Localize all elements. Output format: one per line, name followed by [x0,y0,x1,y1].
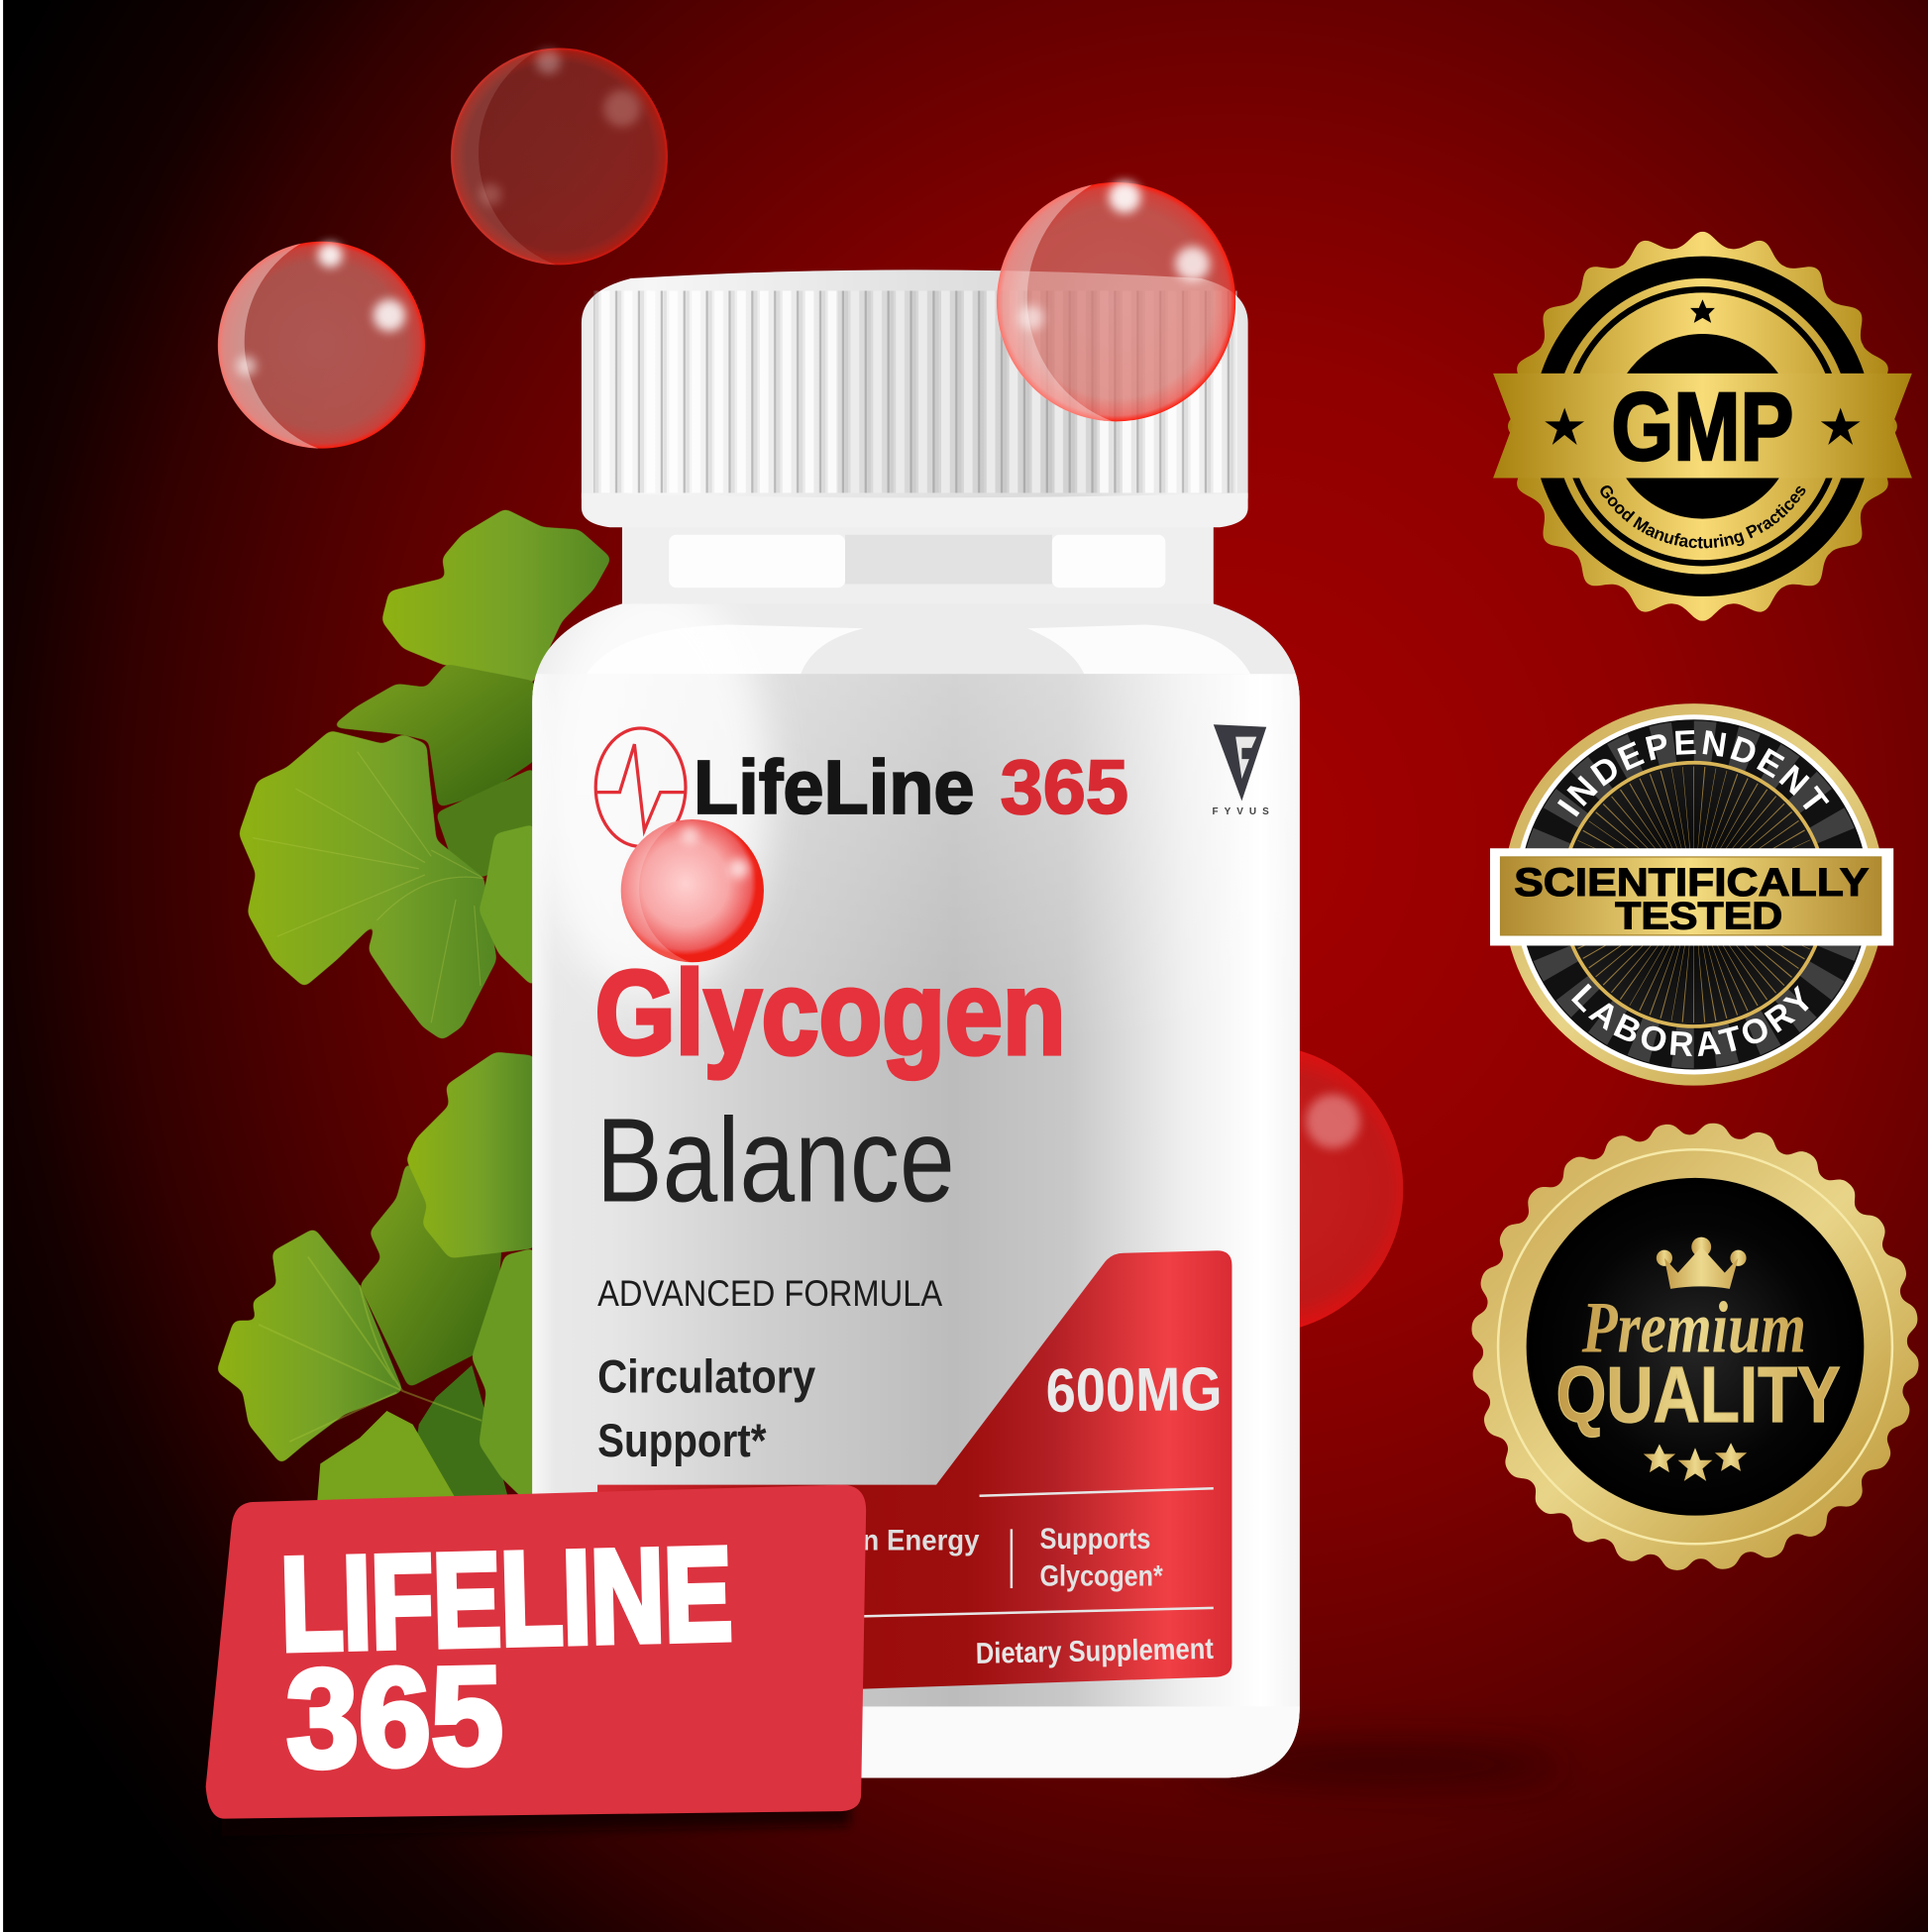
bubble: on cap [997,181,1235,421]
leaf: upper [406,1052,535,1258]
leaf stem and veins [259,1256,482,1442]
product name: Glycogen: Glycogen [595,947,1066,1079]
bubble: on label [620,819,764,962]
advanced formula: ADVANCED FORMULA [597,1272,942,1314]
leaf: right front [480,824,535,988]
supports glycogen text: Supports [1039,1523,1150,1556]
tag text: LIFELINE: LIFELINE [279,1521,733,1678]
FYVUS logo [1213,724,1269,817]
top star [1690,299,1715,323]
body shading [532,580,1300,1783]
badge: premium quality [1466,1118,1924,1576]
dosage: 600MG [1045,1355,1223,1426]
QUALITY text: QUALITY [1555,1350,1841,1439]
scalloped gold edge [1466,1118,1924,1576]
ring segments [1542,742,1847,1047]
sunburst [1630,830,1758,959]
bottle shadow [1195,1742,1564,1786]
cap ridges [593,290,1236,492]
red tag [206,1485,866,1819]
leaf: back middle [360,1162,501,1387]
benefit: circulatory support [597,1350,816,1467]
product name: Balance: Balance [596,1094,955,1228]
bottle body [532,603,1300,1778]
black disc [1519,719,1869,1069]
tag text: 365: 365 [285,1638,504,1796]
cap lip [582,492,1248,527]
script text: Premium [1581,1287,1806,1368]
red tag shadow [222,1801,850,1836]
ribbon stars [1545,408,1584,445]
leaf: right [472,1248,535,1509]
crown [1657,1237,1747,1289]
supports glycogen text: Glycogen* [1039,1560,1163,1593]
leaf: large [217,1229,403,1463]
brand logo: heartbeat circle [595,728,687,846]
band text line 1: SCIENTIFICALLY [1514,861,1869,905]
gold rim [1503,703,1884,1086]
white rim [1514,714,1874,1074]
leaf: top [381,509,611,684]
divider bottom [850,1608,1214,1617]
shoulder highlights [587,625,1250,674]
thin ring [1565,289,1839,563]
bubble: top center [451,49,668,265]
leaf: bottom [317,1411,462,1509]
supports glycogen text [1039,1523,1163,1593]
ginkgo leaves: lower cluster [217,1052,535,1509]
white band [1490,848,1893,945]
red label panel [597,1250,1232,1698]
ginkgo leaves: upper cluster [239,509,611,1040]
divider top [980,1488,1214,1496]
gold ring [1498,1149,1892,1544]
bubble: left [218,242,425,449]
brand name: LifeLine [694,745,975,830]
black ring [1544,268,1862,586]
benefit: circulatory support: Support* [597,1415,767,1467]
badge: GMP [1493,232,1912,621]
bottle [532,269,1300,1783]
inner disc [1562,763,1826,1026]
band text line 2: TESTED [1615,896,1782,938]
leaf: large [239,730,496,1040]
dietary supplement: Dietary Supplement [976,1633,1214,1670]
bubble behind bottle [1115,1045,1403,1334]
leaf veins [253,752,484,1022]
energy text: n Energy [862,1524,980,1556]
leaf: back [331,664,535,807]
FYVUS logo: FYVUS [1213,806,1269,817]
vertical divider [1011,1529,1013,1588]
ring text bottom: LABORATORY [1571,983,1809,1056]
leaf: bottom back [406,1365,511,1509]
cap central shade [838,290,1097,492]
stars [1644,1443,1747,1481]
scalloped gold edge [1503,227,1902,626]
gold band [1501,857,1881,935]
black disc [1527,1178,1864,1516]
leaf: right small [436,768,535,877]
badge: scientifically tested [1490,703,1894,1086]
brand number: 365 [1001,745,1128,830]
neck highlights [669,535,1165,588]
center black [1610,334,1795,519]
bottle neck [622,517,1214,613]
GMP text: GMP [1611,373,1793,481]
benefit: circulatory support: Circulatory [597,1350,816,1403]
curved text: Good Manufacturing Practices [1600,485,1805,549]
ring text top: INDEPENDENT [1557,730,1829,816]
cap [582,269,1248,520]
ribbon [1493,374,1912,479]
